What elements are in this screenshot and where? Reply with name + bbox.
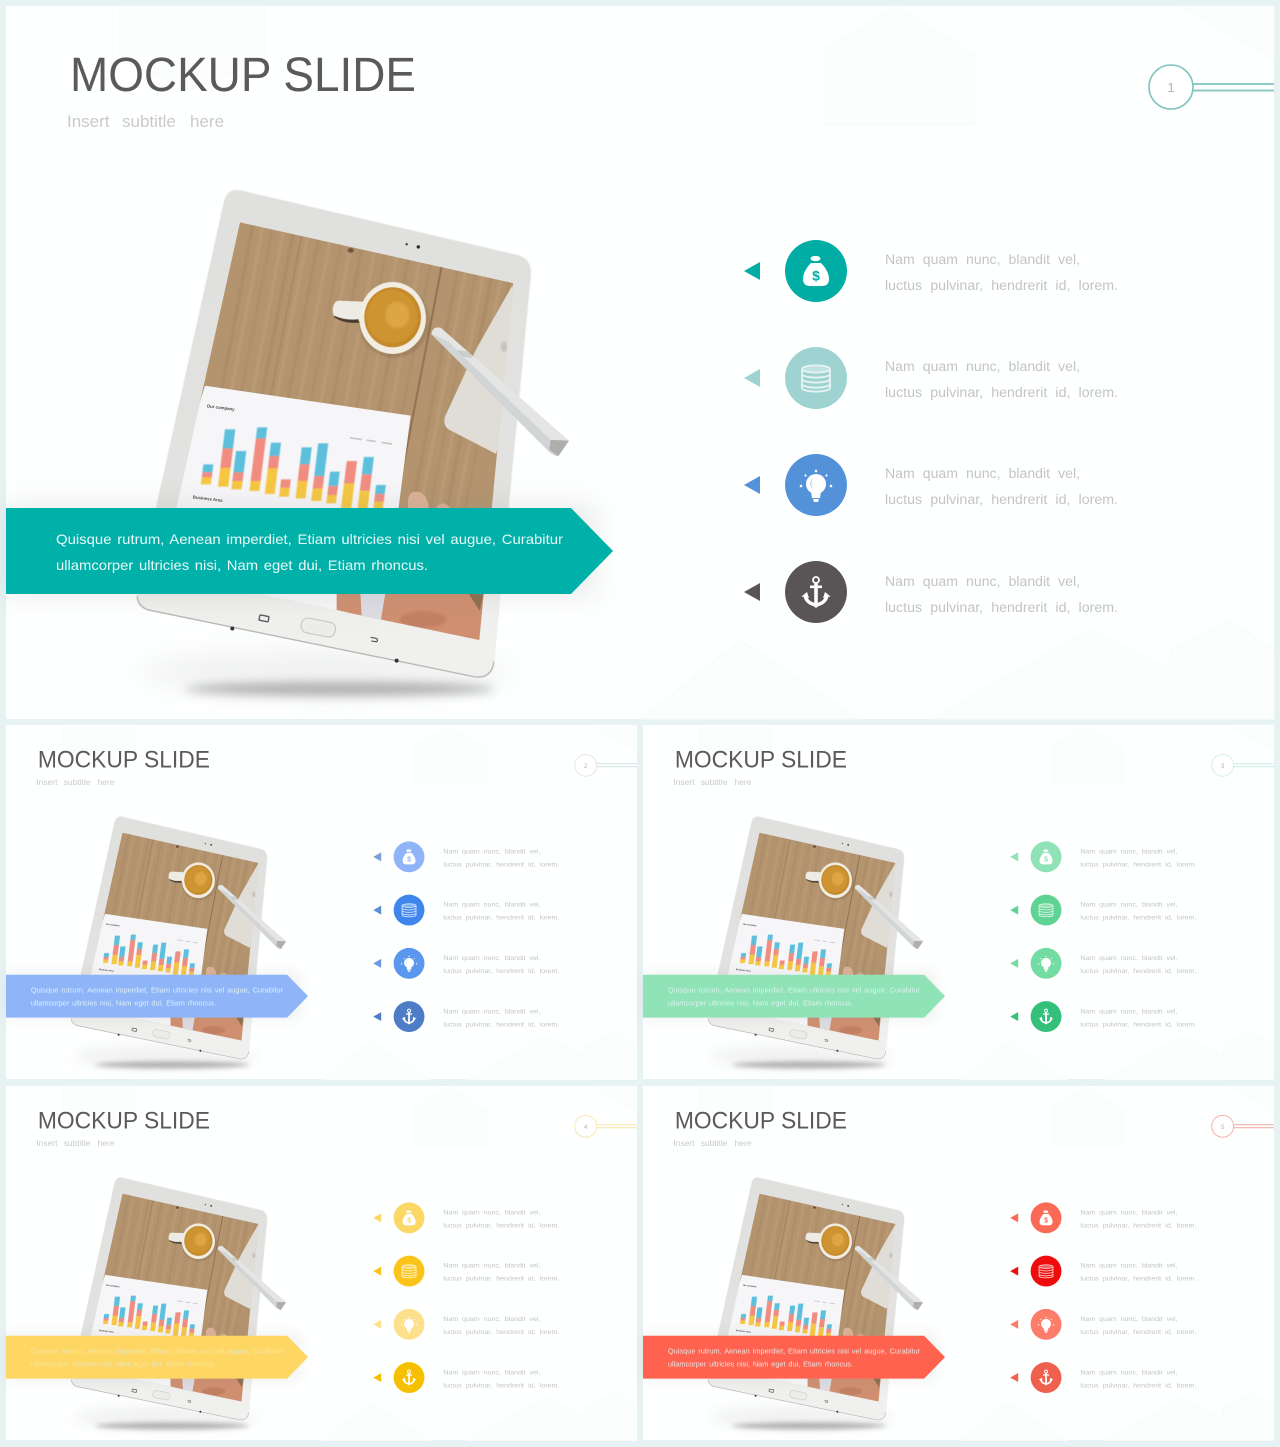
callout banner: ullamcorper ultricies nisi, Nam eget dui, Etiam rhoncus.	[31, 1001, 216, 1008]
subtitle: subtitle	[64, 1138, 91, 1148]
tablet shadow	[710, 1045, 894, 1068]
panel: slide 5 red	[643, 1086, 1274, 1441]
item 4: anchor	[744, 561, 1118, 623]
tablet mockup with photo	[708, 816, 923, 1059]
callout banner	[6, 1336, 308, 1379]
tablet shadow	[73, 1045, 257, 1068]
callout banner: ullamcorper ultricies nisi, Nam eget dui, Etiam rhoncus.	[56, 557, 428, 573]
page number badge: 1	[1167, 80, 1175, 95]
item 1: money bag: luctus pulvinar, hendrerit id, lorem.	[885, 278, 1118, 293]
subtitle: Insert	[36, 1138, 58, 1148]
item 2: coins	[744, 347, 1118, 409]
subtitle: Insert	[673, 1138, 695, 1148]
tablet shadow	[710, 1406, 894, 1429]
item 1: money bag: luctus pulvinar, hendrerit id, lorem.	[443, 861, 559, 868]
item 3: light bulb: luctus pulvinar, hendrerit id, lorem.	[443, 1329, 559, 1336]
callout banner: ullamcorper ultricies nisi, Nam eget dui, Etiam rhoncus.	[668, 1362, 853, 1369]
callout banner: ullamcorper ultricies nisi, Nam eget dui, Etiam rhoncus.	[31, 1362, 216, 1369]
item 1: money bag: Nam quam nunc, blandit vel,	[443, 848, 541, 855]
item 1: money bag: luctus pulvinar, hendrerit id, lorem.	[443, 1222, 559, 1229]
subtitle: subtitle	[64, 777, 91, 787]
page number badge	[1212, 1115, 1274, 1137]
item 2: coins	[373, 1256, 559, 1287]
callout banner: Quisque rutrum, Aenean imperdiet, Etiam ultricies nisi vel augue, Curabitur	[31, 1349, 284, 1356]
subtitle: here	[735, 1138, 752, 1148]
callout banner	[6, 508, 613, 594]
page number badge: 5	[1221, 1124, 1225, 1131]
item 2: coins: Nam quam nunc, blandit vel,	[885, 359, 1080, 374]
title: MOCKUP SLIDE	[70, 49, 416, 102]
item 4: anchor: Nam quam nunc, blandit vel,	[1080, 1370, 1178, 1377]
item 1: money bag: luctus pulvinar, hendrerit id, lorem.	[1080, 1222, 1196, 1229]
item 4: anchor: Nam quam nunc, blandit vel,	[443, 1009, 541, 1016]
item 2: coins: luctus pulvinar, hendrerit id, lorem.	[443, 1276, 559, 1283]
item 3: light bulb: Nam quam nunc, blandit vel,	[1080, 1316, 1178, 1323]
page number badge: 4	[584, 1124, 588, 1131]
item 4: anchor	[1010, 1001, 1196, 1032]
page number badge	[575, 754, 637, 776]
item 2: coins: Nam quam nunc, blandit vel,	[443, 902, 541, 909]
page number badge: 2	[584, 763, 588, 770]
callout banner: Quisque rutrum, Aenean imperdiet, Etiam ultricies nisi vel augue, Curabitur	[56, 531, 563, 547]
item 4: anchor: luctus pulvinar, hendrerit id, lorem.	[1080, 1022, 1196, 1029]
item 4: anchor: luctus pulvinar, hendrerit id, lorem.	[885, 600, 1118, 615]
subtitle: here	[735, 777, 752, 787]
item 2: coins: luctus pulvinar, hendrerit id, lorem.	[885, 385, 1118, 400]
item 3: light bulb: Nam quam nunc, blandit vel,	[885, 466, 1080, 481]
item 2: coins: luctus pulvinar, hendrerit id, lorem.	[443, 915, 559, 922]
subtitle: Insert	[67, 112, 110, 131]
tablet shadow	[140, 650, 510, 696]
subtitle: here	[190, 112, 224, 131]
page number badge	[1149, 65, 1274, 109]
item 1: money bag: Nam quam nunc, blandit vel,	[443, 1209, 541, 1216]
item 1: money bag: Nam quam nunc, blandit vel,	[1080, 1209, 1178, 1216]
panel: slide 3 green	[643, 725, 1274, 1080]
callout banner: Quisque rutrum, Aenean imperdiet, Etiam ultricies nisi vel augue, Curabitur	[668, 1349, 921, 1356]
item 3: light bulb: Nam quam nunc, blandit vel,	[1080, 955, 1178, 962]
banner shadow	[643, 1334, 937, 1380]
item 1: money bag	[1010, 1202, 1196, 1233]
item 1: money bag: luctus pulvinar, hendrerit id, lorem.	[1080, 861, 1196, 868]
callout banner: Quisque rutrum, Aenean imperdiet, Etiam ultricies nisi vel augue, Curabitur	[668, 988, 921, 995]
banner shadow	[6, 1334, 300, 1380]
item 3: light bulb	[1010, 948, 1196, 979]
item 4: anchor	[373, 1362, 559, 1393]
item 1: money bag	[373, 841, 559, 872]
panel: slide 2 blue	[6, 725, 637, 1080]
panel: slide 4 yellow	[6, 1086, 637, 1441]
item 2: coins: luctus pulvinar, hendrerit id, lorem.	[1080, 915, 1196, 922]
title: MOCKUP SLIDE	[675, 1107, 847, 1134]
item 2: coins: luctus pulvinar, hendrerit id, lorem.	[1080, 1276, 1196, 1283]
item 3: light bulb	[744, 454, 1118, 516]
item 3: light bulb: Nam quam nunc, blandit vel,	[443, 955, 541, 962]
title: MOCKUP SLIDE	[38, 1107, 210, 1134]
item 2: coins	[373, 895, 559, 926]
subtitle: subtitle	[122, 112, 176, 131]
tablet mockup with photo	[708, 1177, 923, 1420]
banner shadow	[643, 973, 937, 1019]
page number badge	[1212, 754, 1274, 776]
subtitle: here	[98, 1138, 115, 1148]
item 3: light bulb: Nam quam nunc, blandit vel,	[443, 1316, 541, 1323]
item 1: money bag: Nam quam nunc, blandit vel,	[885, 252, 1080, 267]
item 3: light bulb: luctus pulvinar, hendrerit id, lorem.	[1080, 1329, 1196, 1336]
item 4: anchor: Nam quam nunc, blandit vel,	[1080, 1009, 1178, 1016]
panel backgrounds: small slides	[6, 725, 1274, 1440]
subtitle: Insert	[36, 777, 58, 787]
item 4: anchor: luctus pulvinar, hendrerit id, lorem.	[443, 1383, 559, 1390]
subtitle: subtitle	[701, 1138, 728, 1148]
item 3: light bulb	[373, 948, 559, 979]
page number badge: 3	[1221, 763, 1225, 770]
subtitle: subtitle	[701, 777, 728, 787]
callout banner	[6, 975, 308, 1018]
item 4: anchor: luctus pulvinar, hendrerit id, lorem.	[1080, 1383, 1196, 1390]
item 2: coins	[1010, 1256, 1196, 1287]
item 2: coins: Nam quam nunc, blandit vel,	[1080, 902, 1178, 909]
item 4: anchor: Nam quam nunc, blandit vel,	[443, 1370, 541, 1377]
item 3: light bulb	[373, 1309, 559, 1340]
subtitle: Insert	[673, 777, 695, 787]
callout banner: ullamcorper ultricies nisi, Nam eget dui, Etiam rhoncus.	[668, 1001, 853, 1008]
item 2: coins	[1010, 895, 1196, 926]
callout banner	[643, 975, 945, 1018]
tablet mockup with photo	[71, 816, 286, 1059]
item 2: coins: Nam quam nunc, blandit vel,	[1080, 1263, 1178, 1270]
callout banner: Quisque rutrum, Aenean imperdiet, Etiam ultricies nisi vel augue, Curabitur	[31, 988, 284, 995]
item 4: anchor	[1010, 1362, 1196, 1393]
item 4: anchor	[373, 1001, 559, 1032]
item 4: anchor: Nam quam nunc, blandit vel,	[885, 574, 1080, 589]
title: MOCKUP SLIDE	[675, 746, 847, 773]
banner shadow	[6, 973, 300, 1019]
page number badge	[575, 1115, 637, 1137]
panel: main slide 1	[6, 6, 1274, 719]
item 1: money bag	[744, 240, 1118, 302]
callout banner	[643, 1336, 945, 1379]
item 3: light bulb: luctus pulvinar, hendrerit id, lorem.	[1080, 968, 1196, 975]
item 3: light bulb: luctus pulvinar, hendrerit id, lorem.	[443, 968, 559, 975]
item 1: money bag	[373, 1202, 559, 1233]
subtitle: here	[98, 777, 115, 787]
item 3: light bulb	[1010, 1309, 1196, 1340]
item 1: money bag: Nam quam nunc, blandit vel,	[1080, 848, 1178, 855]
item 3: light bulb: luctus pulvinar, hendrerit id, lorem.	[885, 492, 1118, 507]
item 4: anchor: luctus pulvinar, hendrerit id, lorem.	[443, 1022, 559, 1029]
title: MOCKUP SLIDE	[38, 746, 210, 773]
tablet mockup with photo	[71, 1177, 286, 1420]
tablet shadow	[73, 1406, 257, 1429]
tablet mockup with photo	[136, 190, 569, 677]
item 1: money bag	[1010, 841, 1196, 872]
item 2: coins: Nam quam nunc, blandit vel,	[443, 1263, 541, 1270]
banner shadow	[6, 504, 596, 596]
